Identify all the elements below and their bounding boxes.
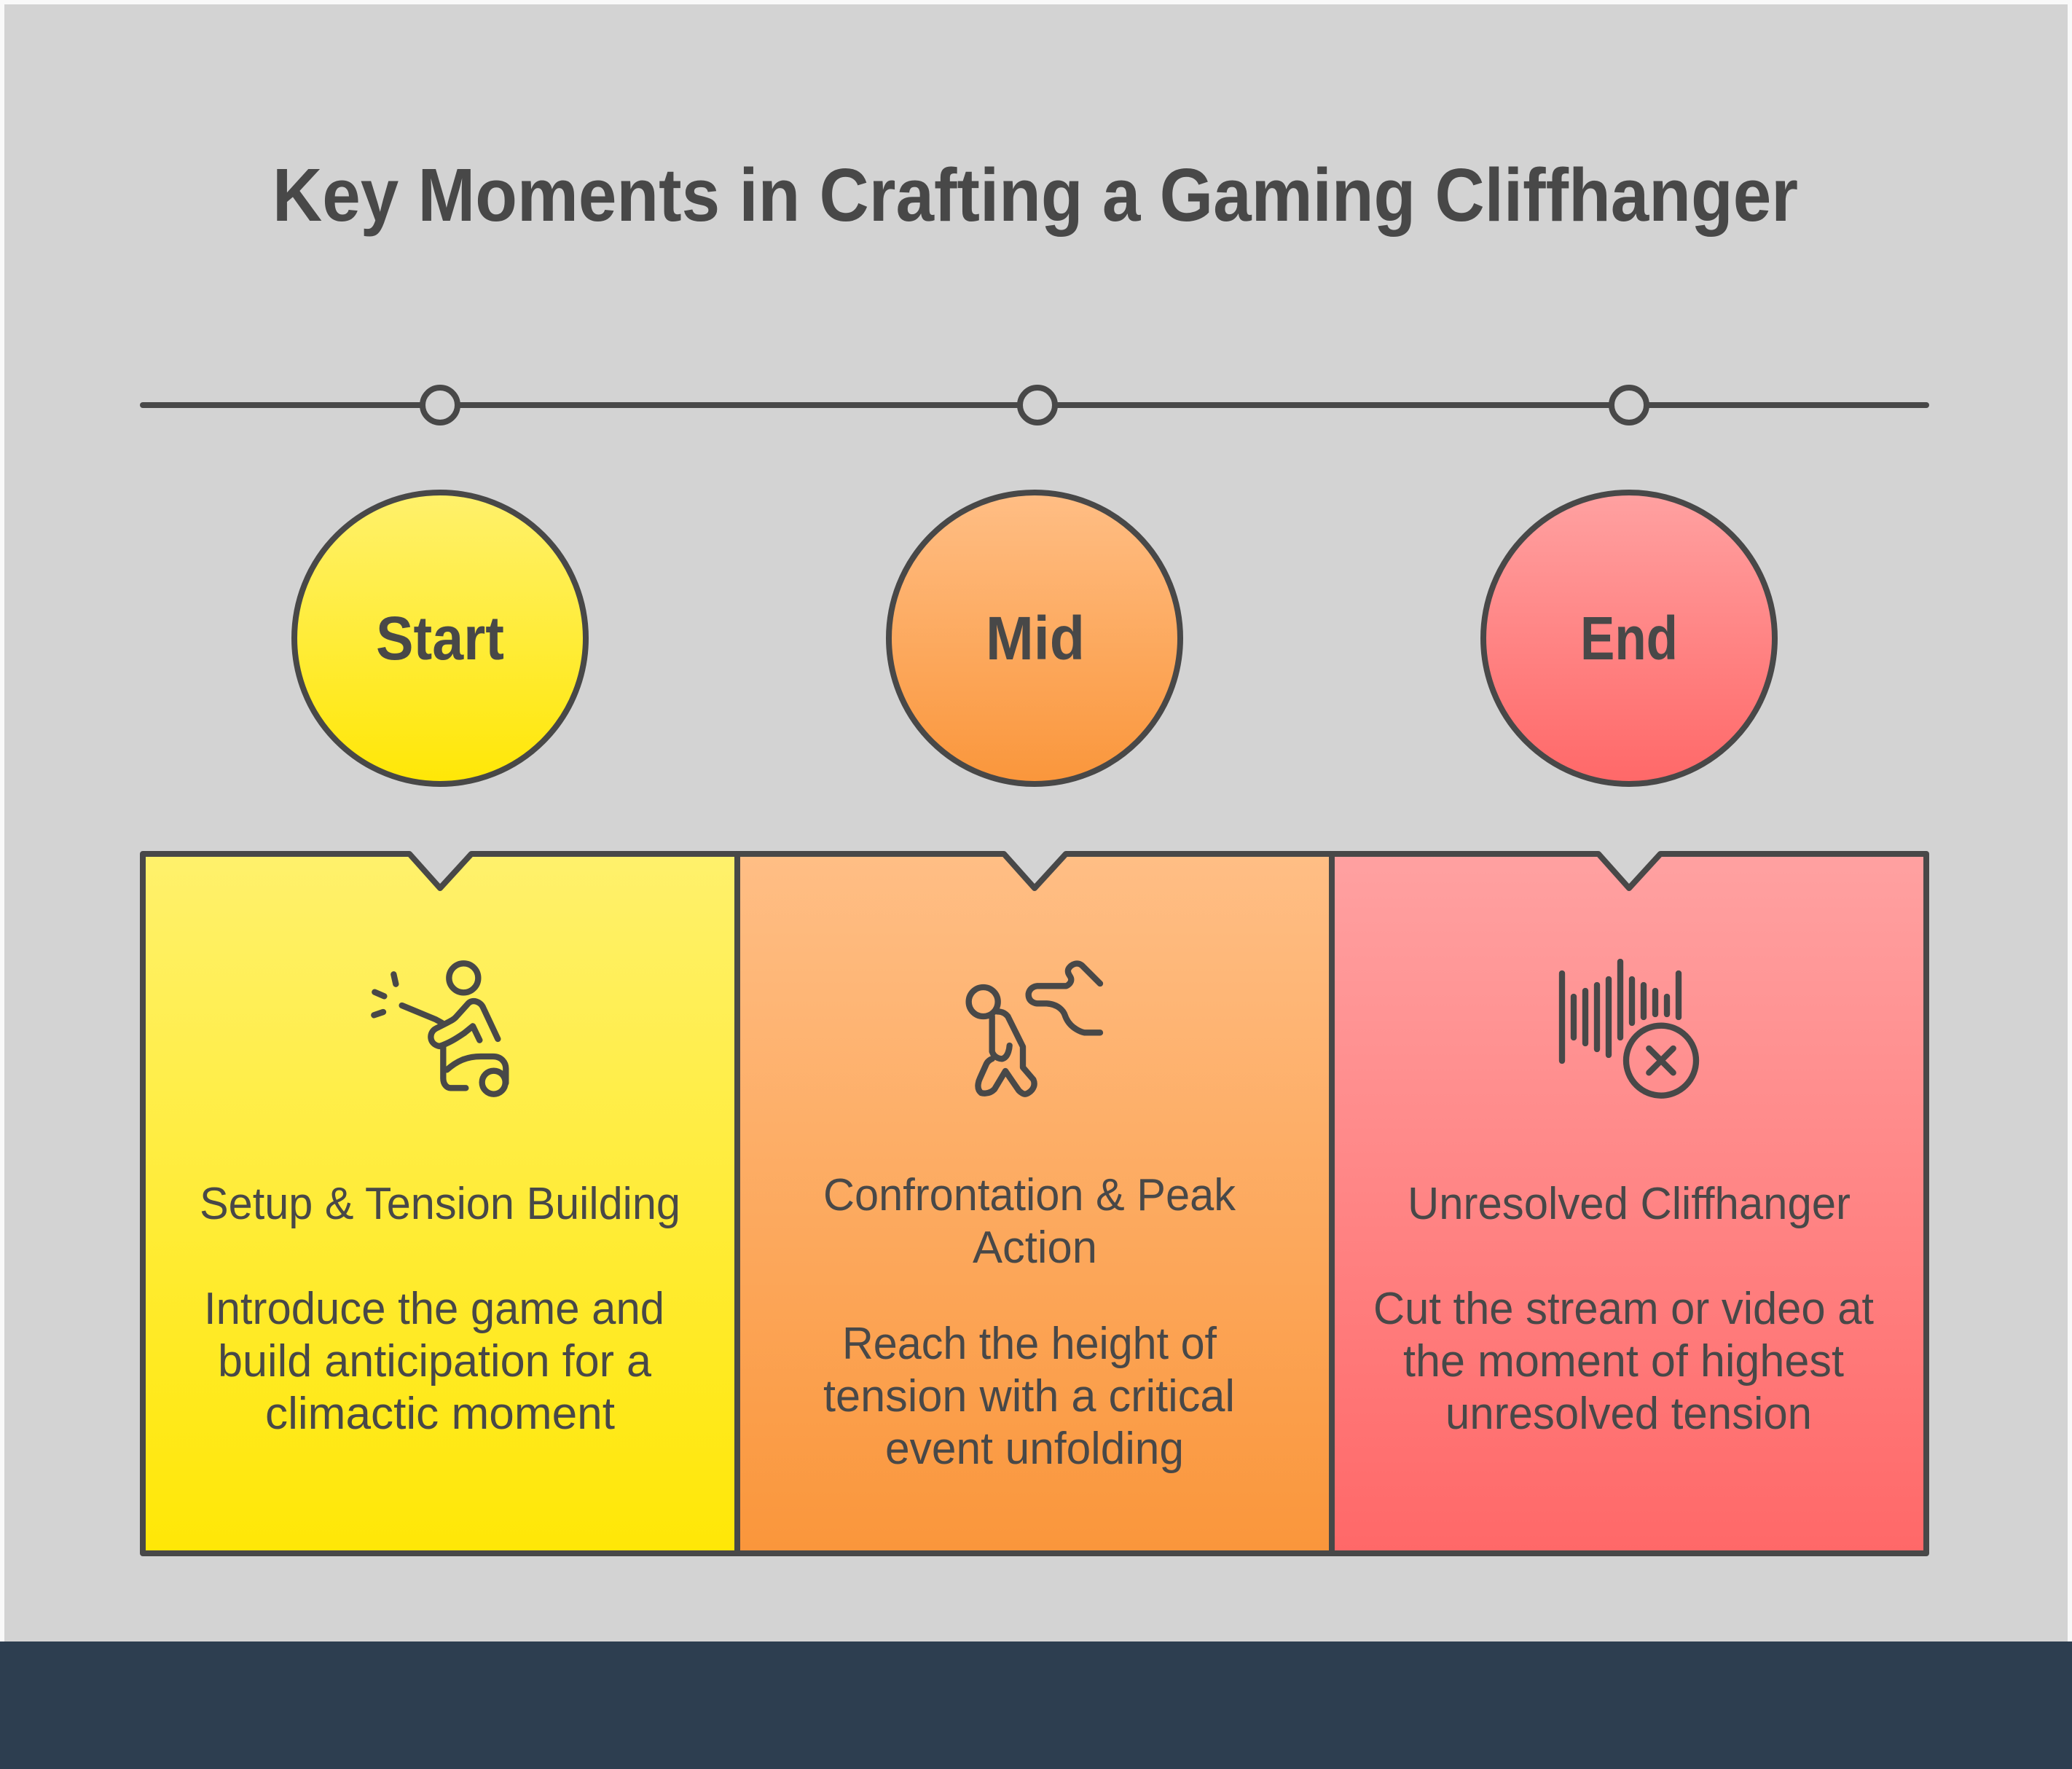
circle: End bbox=[1483, 493, 1775, 784]
text: Unresolved description: Cut the stream or video at bbox=[1373, 1284, 1874, 1334]
text: Confrontation heading bbox=[823, 1170, 1236, 1273]
timeline bbox=[143, 388, 1926, 423]
text: Unresolved heading: Unresolved Cliffhanger bbox=[1408, 1179, 1851, 1229]
circle: End: End bbox=[1580, 604, 1678, 672]
text: Unresolved description bbox=[1373, 1284, 1874, 1439]
navy footer band bbox=[0, 1641, 2072, 1769]
text: Confrontation description: Reach the height of bbox=[842, 1319, 1217, 1369]
title: Key Moments in Crafting a Gaming Cliffhanger bbox=[272, 153, 1798, 237]
text: Unresolved description: unresolved tension bbox=[1445, 1389, 1812, 1439]
text: Setup heading: Setup & Tension Building bbox=[200, 1179, 680, 1229]
circle: Mid: Mid bbox=[986, 604, 1085, 672]
text: Setup description: build anticipation for a bbox=[218, 1336, 652, 1386]
text: Setup description: Introduce the game and bbox=[204, 1284, 664, 1334]
text: Setup description: climactic moment bbox=[265, 1389, 615, 1439]
panel: End bbox=[1332, 854, 1926, 1553]
text: Setup description bbox=[204, 1284, 664, 1439]
text: Unresolved description: the moment of highest bbox=[1403, 1336, 1844, 1386]
icon: walking figure and winding path bbox=[969, 964, 1100, 1094]
panel: Start bbox=[143, 854, 737, 1553]
icon: sound wave with cancel mark bbox=[1562, 962, 1696, 1096]
text: Confrontation description: event unfolding bbox=[885, 1424, 1184, 1474]
icon: person casting bbox=[374, 963, 506, 1094]
circle: Mid bbox=[889, 493, 1180, 784]
text: Confrontation description bbox=[823, 1319, 1235, 1474]
text: Confrontation heading: Action bbox=[973, 1223, 1097, 1273]
circle: Start: Start bbox=[376, 604, 504, 672]
panel: Mid bbox=[737, 854, 1332, 1553]
text: Confrontation description: tension with a critical bbox=[823, 1371, 1235, 1421]
circle: Start bbox=[294, 493, 586, 784]
text: Confrontation heading: Confrontation & Peak bbox=[823, 1170, 1236, 1220]
